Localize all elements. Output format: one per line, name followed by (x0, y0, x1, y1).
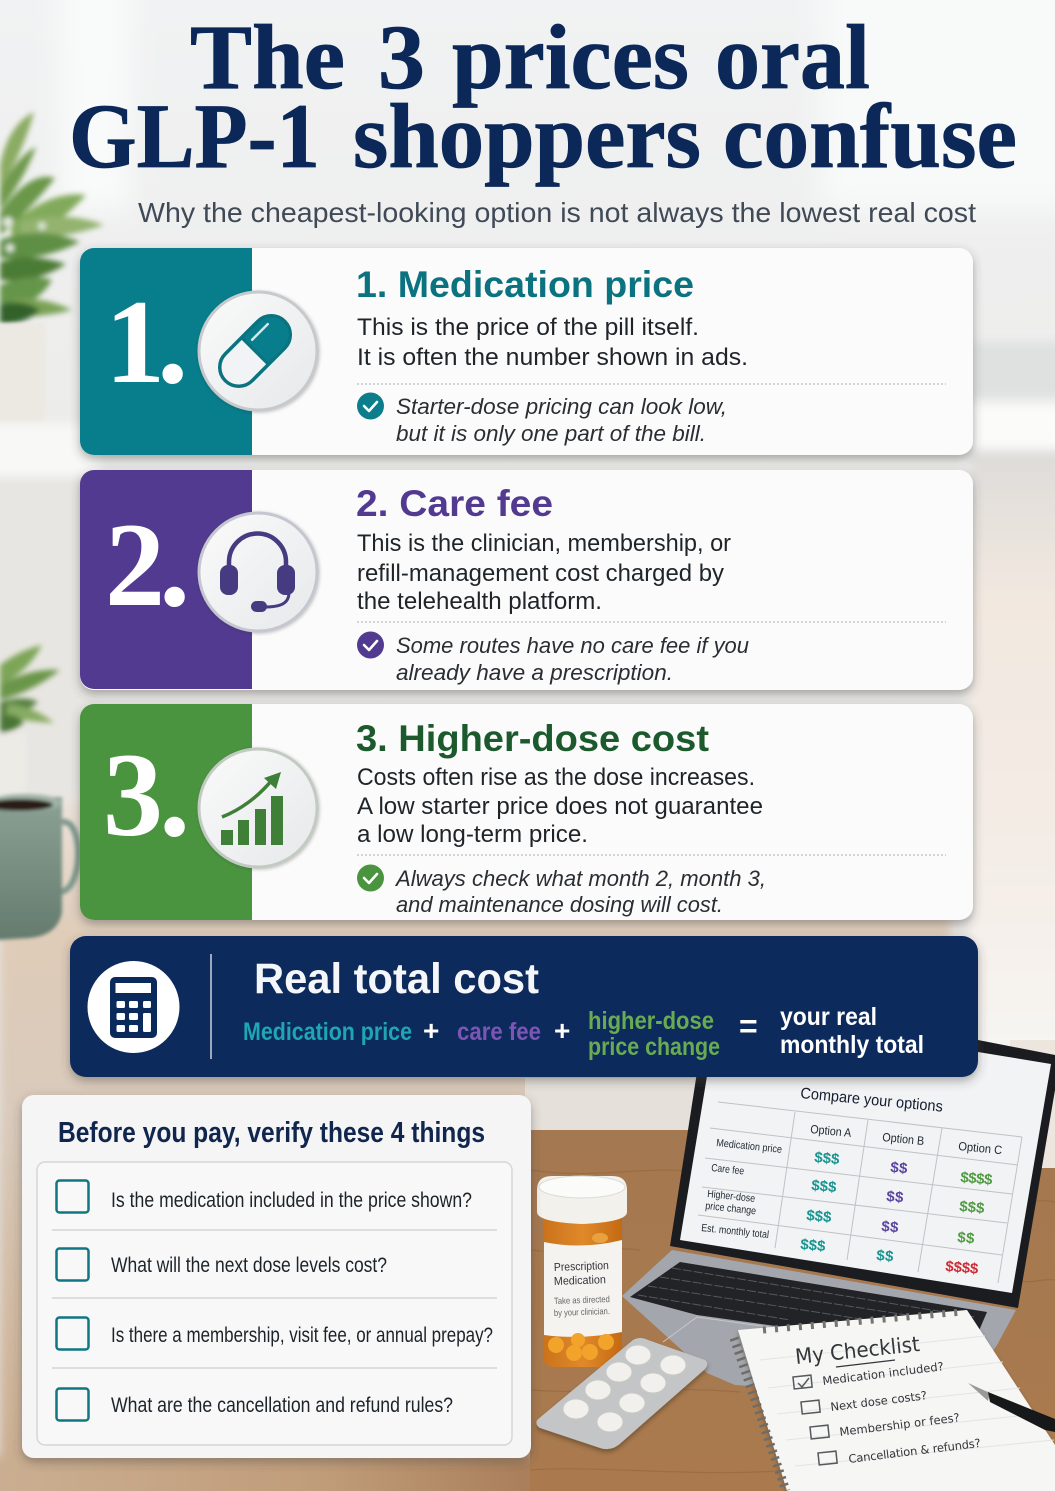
pill bottle: Take as directed (554, 1294, 610, 1306)
item 3: Is there a membership, visit fee, or annual prepay? (111, 1324, 493, 1347)
title: GLP-1 (69, 85, 320, 187)
body text: a low long-term price. (357, 821, 588, 848)
equation: higher-dose (588, 1007, 714, 1035)
equation (243, 1003, 924, 1061)
screen table: $$$ (806, 1207, 833, 1226)
screen table: Medication price (716, 1137, 783, 1156)
notebook checklist: Membership or fees? (839, 1410, 960, 1439)
laptop with comparison table (622, 1040, 1055, 1400)
item 2: What will the next dose levels cost? (111, 1254, 387, 1277)
note (396, 394, 727, 446)
screen table: $$ (881, 1218, 900, 1237)
plant pot (0, 323, 46, 421)
number block 3: . (159, 725, 190, 863)
note: Some routes have no care fee if you (396, 633, 749, 658)
heading: 3. Higher-dose cost (356, 718, 709, 759)
number block 2: 2 (105, 498, 165, 631)
heading: Real total cost (254, 955, 539, 1003)
title: 3 (378, 6, 425, 108)
subtitle: Why the cheapest-looking option is not always the lowest real cost (138, 197, 976, 228)
title: oral (715, 6, 870, 108)
item 4: What are the cancellation and refund rules? (111, 1394, 453, 1417)
screen table: Higher-dose (707, 1188, 756, 1205)
title: prices (452, 6, 689, 108)
title (69, 6, 1017, 187)
pill bottle: by your clinician. (554, 1306, 610, 1318)
heading: 1. Medication price (356, 264, 694, 305)
screen table: $$ (886, 1188, 905, 1207)
icon: headset (199, 513, 317, 631)
icon: check (357, 392, 384, 420)
body text: Costs often rise as the dose increases. (357, 764, 755, 791)
number block 2 (80, 470, 252, 689)
body text (357, 314, 748, 371)
equation: price change (588, 1033, 720, 1061)
notebook checklist (734, 1310, 1055, 1491)
note: and maintenance dosing will cost. (396, 892, 723, 917)
coffee mug (0, 794, 78, 940)
screen table: $$$ (800, 1236, 827, 1255)
body text: the telehealth platform. (357, 588, 602, 615)
screen table: Est. monthly total (701, 1222, 770, 1241)
screen table (698, 1085, 1022, 1283)
heading: Before you pay, verify these 4 things (58, 1117, 485, 1149)
equation: = (739, 1008, 758, 1044)
number block 1 (80, 248, 252, 455)
body text: It is often the number shown in ads. (357, 344, 748, 371)
notebook checklist: Medication included? (822, 1359, 944, 1388)
item 2 (56, 1248, 387, 1280)
keyboard (630, 1262, 987, 1340)
screen table: Option C (958, 1139, 1003, 1157)
screen table: Option A (810, 1122, 852, 1140)
body text (357, 530, 731, 615)
screen table: price change (705, 1200, 757, 1217)
laptop screen bezel (670, 1040, 1055, 1308)
blister pack (536, 1338, 707, 1449)
icon: calculator (88, 961, 180, 1053)
body text: This is the clinician, membership, or (357, 530, 731, 557)
screen table: Option B (882, 1130, 925, 1148)
title: confuse (723, 85, 1017, 187)
number block 3 (80, 704, 252, 920)
icon: check (357, 632, 384, 658)
equation: your real (780, 1003, 877, 1031)
laptop base (622, 1250, 1016, 1400)
note (394, 866, 766, 917)
icon: pill capsule (199, 292, 317, 410)
left plant lower (0, 645, 60, 795)
screen table: $$$ (814, 1149, 841, 1168)
body text: A low starter price does not guarantee (357, 793, 763, 820)
equation: monthly total (780, 1031, 924, 1059)
equation: + (554, 1015, 570, 1046)
screen table: $$$$ (945, 1258, 980, 1278)
notebook checklist: My Checklist (794, 1332, 921, 1369)
heading: 2. Care fee (356, 483, 553, 524)
icon: rising bar chart (199, 749, 317, 867)
body text: refill-management cost charged by (357, 560, 724, 587)
pill bottle (537, 1176, 627, 1367)
notebook checklist: Cancellation & refunds? (848, 1436, 981, 1466)
number block 1: . (157, 272, 188, 410)
screen table: Care fee (711, 1162, 745, 1177)
pen (968, 1383, 1055, 1432)
left plant top (0, 112, 104, 421)
equation: care fee (457, 1018, 541, 1046)
number block 1: 1 (105, 275, 165, 408)
note: Always check what month 2, month 3, (394, 866, 766, 891)
screen table: $$$ (959, 1198, 986, 1217)
screen table: Compare your options (800, 1085, 944, 1116)
number block 2: . (159, 495, 190, 633)
screen table: $$$ (811, 1177, 838, 1196)
screen table: $$ (890, 1159, 909, 1178)
item 3 (56, 1318, 493, 1350)
pill bottle: Prescription (554, 1260, 609, 1274)
screen table: $$ (876, 1247, 895, 1266)
note: already have a prescription. (396, 660, 673, 685)
panel: verification checklist (22, 1095, 531, 1458)
panel: care fee (80, 470, 973, 690)
item 4 (56, 1388, 453, 1420)
note (396, 633, 749, 685)
pill bottle: Medication (554, 1274, 606, 1288)
screen table: $$$$ (960, 1169, 994, 1189)
number block 3: 3 (103, 728, 163, 861)
screen table: $$ (957, 1229, 976, 1248)
body text (357, 764, 763, 848)
equation: Medication price (243, 1018, 412, 1046)
notebook checklist: Next dose costs? (830, 1388, 928, 1414)
icon: check (357, 864, 384, 892)
body text: This is the price of the pill itself. (357, 314, 699, 341)
equation: + (423, 1015, 439, 1046)
note: Starter-dose pricing can look low, (396, 394, 727, 419)
panel: real total cost (70, 936, 978, 1077)
panel: higher-dose cost (80, 704, 973, 920)
note: but it is only one part of the bill. (396, 421, 706, 446)
title: shoppers (353, 85, 701, 187)
item 1 (56, 1180, 472, 1212)
title: The (190, 6, 345, 108)
item 1: Is the medication included in the price shown? (111, 1189, 472, 1212)
panel: medication price (80, 248, 973, 455)
